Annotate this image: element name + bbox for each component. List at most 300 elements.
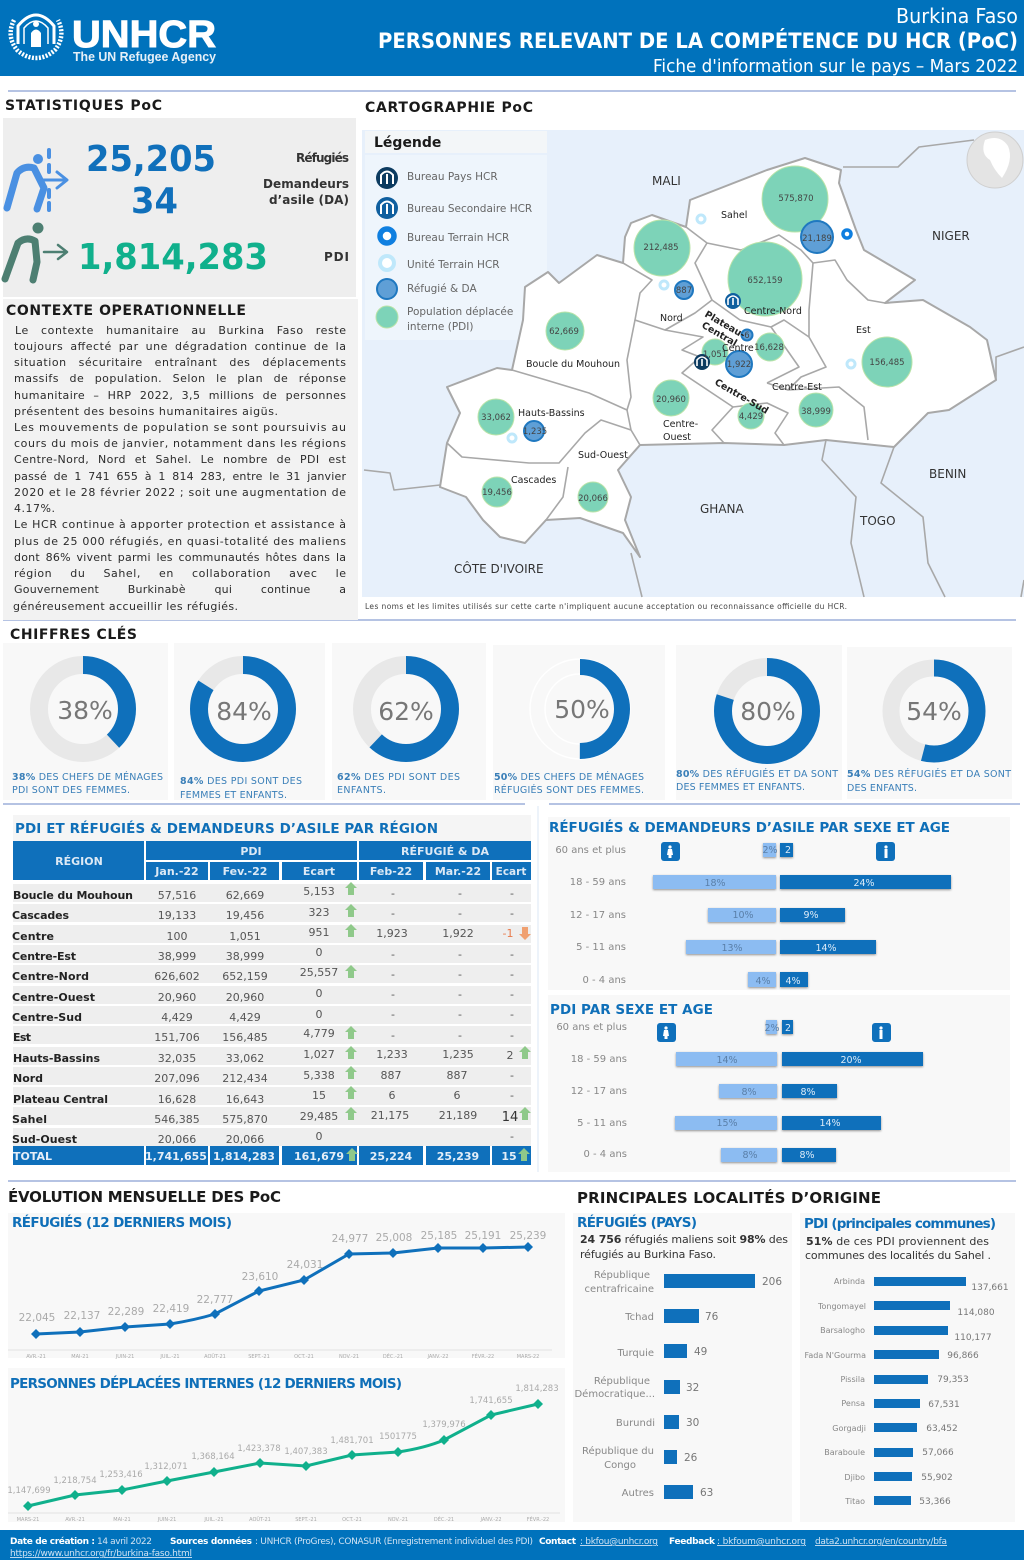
table rows: - [391, 948, 395, 961]
donut 84%: 84% DES PDI SONT DES [180, 776, 302, 787]
bubble values: 575,870 [778, 194, 814, 204]
table rows: 20,066 [226, 1133, 264, 1146]
panel: origine PDI: 51% de ces PDI proviennent des [806, 1235, 989, 1248]
table rows: 212,434 [222, 1072, 268, 1085]
text block: context paragraph: 2020 et le 28 février 2022 ; soit une augmentation de [14, 486, 346, 499]
table rows: - [391, 887, 395, 900]
panel: statistiques PoC: STATISTIQUES PoC [5, 98, 162, 114]
panel: origine réfugiés: 76 [705, 1311, 719, 1323]
line chart: PDI: DÉC.-21 [434, 1515, 454, 1523]
table rows: Hauts-Bassins [13, 1052, 100, 1065]
table title: PDI ET RÉFUGIÉS & DEMANDEURS D’ASILE PAR RÉGION [15, 820, 438, 837]
bubble values [481, 194, 905, 504]
donut 50%: 50% DES CHEFS DE MÉNAGES [494, 771, 644, 783]
text block: context paragraph: Le contexte humanitaire au Burkina Faso reste [15, 324, 346, 337]
table rows: 6 [454, 1089, 460, 1102]
table rows: 5,153 [303, 885, 335, 898]
line chart: réfugiés: RÉFUGIÉS (12 DERNIERS MOIS) [12, 1214, 232, 1231]
stat: réfugiés [86, 139, 349, 180]
footer: 14 avril 2022 [97, 1537, 152, 1547]
table total row [13, 1146, 531, 1165]
chart: réfugiés par sexe et age: 9% [803, 910, 819, 921]
heading: principales localités: PRINCIPALES LOCALITÉS D’ORIGINE [577, 1188, 881, 1207]
chart: PDI par sexe et age: 8% [799, 1150, 815, 1161]
footer: Sources données [170, 1536, 252, 1547]
chart: PDI par sexe et age: 14% [819, 1118, 841, 1129]
line chart: PDI: 1,379,976 [422, 1420, 466, 1430]
chart: PDI par sexe et age: 15% [716, 1118, 738, 1129]
chart: réfugiés par sexe et age [548, 817, 1010, 990]
heading: évolution mensuelle: ÉVOLUTION MENSUELLE DES PoC [8, 1187, 281, 1206]
panel: origine réfugiés: 49 [694, 1346, 707, 1358]
chart: réfugiés par sexe et age: 12 - 17 ans [570, 910, 626, 921]
chart: PDI par sexe et age: 20% [840, 1055, 862, 1066]
chart: réfugiés par sexe et age: 14% [815, 943, 837, 954]
table header: Ecart [496, 866, 526, 878]
footer: Contact [539, 1537, 577, 1547]
table rows: 62,669 [226, 889, 264, 902]
donut 80%: DES FEMMES ET ENFANTS. [676, 782, 805, 793]
panel: origine PDI: 110,177 [954, 1333, 992, 1343]
table rows: Centre [12, 930, 54, 943]
donut 50%: RÉFUGIÉS SONT DES FEMMES. [494, 784, 644, 796]
table rows: - [391, 988, 395, 1001]
panel: origine PDI: Pissila [840, 1375, 865, 1384]
map legend: Bureau Terrain HCR [407, 232, 509, 244]
panel: origine réfugiés: République [594, 1269, 650, 1281]
table rows: Centre-Nord [12, 970, 89, 983]
table rows: 16,628 [158, 1093, 196, 1106]
table rows: Centre-Sud [12, 1011, 82, 1024]
donut 84%: 84% [216, 697, 272, 726]
text block: context paragraph: Centre-Nord, Nord et Sahel. Le nombre de PDI est [14, 453, 347, 466]
stat: réfugiés: 25,205 [86, 139, 216, 180]
table rows: - [458, 907, 462, 920]
text block: context paragraph: Les mouvements de population se sont poursuivis au [14, 421, 346, 434]
line chart: PDI: FÉVR.-22 [527, 1515, 549, 1523]
stat: demandeurs d'asile: d’asile (DA) [269, 193, 349, 207]
table rows: - [458, 968, 462, 981]
line chart: réfugiés: 22,045 [19, 1312, 55, 1324]
chart: réfugiés par sexe et age: RÉFUGIÉS & DEMANDEURS D’ASILE PAR SEXE ET AGE [549, 819, 950, 836]
chart: PDI par sexe et age: 14% [716, 1055, 738, 1066]
text block: context paragraph [13, 324, 347, 613]
header title: Burkina Faso [896, 4, 1018, 28]
table rows: Centre-Est [12, 950, 76, 963]
footer [0, 1530, 1024, 1560]
table rows: 1,027 [303, 1048, 335, 1061]
region labels: Centre [722, 343, 754, 354]
table rows: 626,602 [154, 970, 200, 983]
chart: PDI par sexe et age: 60 ans et plus [556, 1022, 627, 1033]
line chart: réfugiés: 24,977 [332, 1233, 368, 1245]
line chart: PDI: MAI-21 [113, 1517, 131, 1523]
bubble values: 62,669 [549, 327, 579, 337]
bubble values: 6 [744, 331, 750, 341]
table header: Feb-22 [370, 865, 412, 878]
line chart: PDI: AVR.-21 [65, 1517, 85, 1523]
text block: context paragraph: région du Sahel, en collaboration avec le [14, 567, 346, 580]
section: chiffres clés: CHIFFRES CLÉS [10, 626, 137, 643]
text block: context paragraph: Gouvernement Burkinabè qui continue a [14, 583, 346, 596]
table rows: 19,456 [226, 909, 264, 922]
table rows: 546,385 [154, 1113, 200, 1126]
table rows: - [458, 948, 462, 961]
table rows: - [510, 948, 514, 961]
panel: origine PDI: 114,080 [957, 1308, 995, 1318]
donut 54% [847, 668, 1011, 794]
region labels: Est [856, 325, 871, 336]
table rows: 151,706 [154, 1031, 200, 1044]
table rows: - [510, 887, 514, 900]
line chart: réfugiés: MAI-21 [71, 1354, 89, 1360]
donut 62% [337, 665, 460, 796]
change arrows [345, 882, 531, 1120]
line chart: réfugiés: 24,031 [287, 1259, 323, 1271]
icon: refugee crossing border [7, 150, 67, 210]
table header: Fev.-22 [223, 865, 267, 878]
line chart: PDI: 1,253,416 [99, 1470, 143, 1480]
line chart: réfugiés: 25,185 [421, 1230, 457, 1242]
table rows: 21,189 [439, 1109, 477, 1122]
chart: réfugiés par sexe et age: 13% [721, 943, 743, 954]
table rows: 20,960 [226, 991, 264, 1004]
table rows: 14 [502, 1110, 518, 1125]
bubble values: 21,189 [802, 234, 832, 244]
chart: réfugiés par sexe et age: 60 ans et plus [555, 845, 626, 856]
table rows: 0 [316, 987, 322, 1000]
chart: PDI par sexe et age: 18 - 59 ans [571, 1054, 627, 1065]
HCR offices [508, 215, 855, 442]
icon: globe [967, 132, 1023, 188]
icon: UNHCR emblem [11, 15, 61, 58]
table rows: 156,485 [222, 1031, 268, 1044]
table header: RÉFUGIÉ & DA [401, 845, 489, 858]
table rows: - [510, 1069, 514, 1082]
table header: Ecart [303, 865, 335, 878]
donut 80%: 80% [740, 697, 796, 726]
table rows: 5,338 [303, 1069, 335, 1082]
panel: origine réfugiés: 32 [686, 1382, 699, 1394]
section: chiffres clés [3, 626, 1012, 801]
panel: origine réfugiés: 26 [684, 1452, 698, 1464]
panel: origine PDI: 53,366 [919, 1497, 951, 1507]
line chart: PDI: 1,312,071 [144, 1462, 188, 1472]
line chart: réfugiés: JUIL.-21 [159, 1354, 180, 1360]
panel: origine réfugiés: 24 756 réfugiés maliens soit 98% des [580, 1233, 788, 1246]
region labels: Hauts-Bassins [518, 408, 585, 419]
panel: origine réfugiés: Turquie [617, 1348, 654, 1359]
heading: cartographie: CARTOGRAPHIE PoC [365, 100, 533, 116]
bubble values: 1,922 [727, 360, 751, 370]
line chart: PDI: 1,407,383 [284, 1447, 328, 1457]
panel: map [362, 130, 1024, 597]
donut 50%: 50% [554, 695, 610, 724]
stat: PDI: 1,814,283 [78, 237, 268, 278]
chart: réfugiés par sexe et age: 4% [755, 976, 771, 987]
table rows: 1,233 [376, 1048, 408, 1061]
bubble values: 16,628 [754, 343, 784, 353]
table total row: 25,239 [437, 1150, 479, 1163]
footer: data2.unhcr.org/en/country/bfa [815, 1537, 947, 1547]
line chart: réfugiés: NOV.-21 [339, 1354, 359, 1360]
table rows: 21,175 [371, 1109, 409, 1122]
table rows: 887 [380, 1069, 402, 1082]
table rows: 1,922 [442, 927, 474, 940]
text block: context paragraph: plus de 25 000 réfugiés, en quasi-totalité des maliens [14, 535, 346, 548]
line chart: réfugiés: 22,137 [64, 1310, 100, 1322]
chart: réfugiés par sexe et age: 2 [785, 845, 791, 856]
table header: RÉGION [55, 855, 103, 868]
line chart: réfugiés: OCT.-21 [294, 1354, 314, 1360]
map legend: Bureau Pays HCR [407, 171, 498, 183]
line chart: réfugiés: JANV.-22 [426, 1354, 449, 1360]
chart: PDI par sexe et age: 2% [764, 1023, 780, 1034]
table rows [12, 882, 531, 1146]
icon: displaced person [5, 222, 67, 280]
text block: context paragraph: massifs de population. Selon le plan de réponse [14, 372, 346, 385]
table rows: 575,870 [222, 1113, 268, 1126]
footer: : UNHCR (ProGres), CONASUR (Enregistrement individuel des PDI) [255, 1537, 533, 1547]
table total row: 161,679 [294, 1150, 344, 1163]
region labels: Cascades [511, 475, 556, 486]
panel: origine PDI: 96,866 [947, 1351, 979, 1361]
stat: PDI: PDI [324, 250, 349, 264]
line chart: réfugiés: 25,239 [510, 1230, 546, 1242]
panel: origine PDI [800, 1213, 1015, 1522]
table rows: 25,557 [300, 966, 338, 979]
panel: origine PDI: Djibo [844, 1473, 865, 1482]
panel: origine réfugiés [573, 1213, 792, 1522]
bubble values: 19,456 [482, 488, 512, 498]
bubble values: 20,066 [578, 494, 608, 504]
table rows: 32,035 [158, 1052, 196, 1065]
chart: PDI par sexe et age: 8% [742, 1150, 758, 1161]
donut 38%: 38% [57, 696, 113, 725]
chart: réfugiés par sexe et age: 2% [762, 845, 778, 856]
panel: origine réfugiés: 63 [700, 1487, 713, 1499]
table rows: - [510, 1130, 514, 1143]
chart: PDI par sexe et age: 8% [741, 1087, 757, 1098]
chart: PDI par sexe et age: PDI PAR SEXE ET AGE [550, 1002, 713, 1018]
table total row: TOTAL [13, 1150, 52, 1163]
line chart: PDI: OCT.-21 [342, 1517, 362, 1523]
table rows: - [458, 1008, 462, 1021]
table rows: Cascades [12, 909, 69, 922]
line chart: PDI: MARS-21 [17, 1517, 39, 1523]
table rows: Nord [13, 1072, 43, 1085]
panel: origine PDI: 79,353 [937, 1375, 969, 1385]
panel: origine PDI: Gorgadji [832, 1424, 866, 1433]
map legend: Réfugié & DA [407, 283, 477, 295]
donut 80% [676, 667, 838, 793]
donut 38% [12, 665, 163, 796]
panel: origine PDI: 57,066 [922, 1448, 954, 1458]
table rows: 4,779 [303, 1027, 335, 1040]
panel: origine PDI: 63,452 [926, 1424, 958, 1434]
chart: réfugiés par sexe et age: 0 - 4 ans [582, 975, 626, 986]
stat: demandeurs d'asile: 34 [131, 181, 178, 222]
line chart: PDI: 1,368,164 [191, 1452, 235, 1462]
panel: origine PDI: Barsalogho [820, 1326, 865, 1335]
panel: origine réfugiés: République [594, 1375, 650, 1387]
icon: woman [661, 842, 680, 861]
country labels [454, 174, 970, 576]
map legend: Population déplacée [407, 306, 513, 318]
line chart: réfugiés: FÉVR.-22 [472, 1352, 494, 1360]
table rows: 887 [446, 1069, 468, 1082]
country labels: GHANA [700, 502, 745, 516]
chart: PDI par sexe et age: 2 [785, 1023, 791, 1034]
line chart: PDI: 1,218,754 [53, 1476, 97, 1486]
chart: réfugiés par sexe et age: 18 - 59 ans [570, 877, 626, 888]
panel: origine réfugiés: Démocratique... [574, 1388, 655, 1400]
footer: : bkfou@unhcr.org [580, 1537, 658, 1547]
map legend: Légende [374, 135, 441, 151]
panel: regional table [12, 815, 531, 1165]
region labels: Centre- [663, 419, 698, 430]
panel: contexte opérationnelle: CONTEXTE OPERATIONNELLE [6, 303, 246, 319]
icon: man [872, 1023, 891, 1042]
panel: origine PDI: Baraboule [824, 1448, 865, 1457]
text block: context paragraph: cours du mois de janvier, notamment dans les régions [14, 437, 346, 450]
table rows: -1 [503, 927, 513, 940]
header title [378, 4, 1018, 77]
chart: réfugiés par sexe et age: 10% [732, 910, 754, 921]
line chart: PDI: JUIN-21 [157, 1517, 176, 1523]
stat: demandeurs d'asile [131, 177, 349, 222]
panel: origine réfugiés: réfugiés au Burkina Faso. [580, 1248, 716, 1261]
region labels [511, 210, 871, 486]
table rows: - [391, 907, 395, 920]
bubble values: 33,062 [481, 413, 511, 423]
panel: origine réfugiés: Tchad [624, 1312, 654, 1323]
line chart: PDI: 1,147,699 [7, 1486, 51, 1496]
table rows: 951 [308, 926, 330, 939]
table rows: 20,960 [158, 991, 196, 1004]
table rows: Plateau Central [13, 1093, 108, 1106]
table rows: 2 [506, 1049, 514, 1062]
footer: Feedback [669, 1537, 716, 1547]
text block: context paragraph: dont 86% vivent parmi les communautés hôtes dans la [14, 551, 346, 564]
donut 54%: DES ENFANTS. [847, 783, 917, 794]
line chart: PDI: 1,741,655 [469, 1396, 513, 1406]
text block: context paragraph: passé de 1 741 655 à 1 814 283, entre le 31 janvier [14, 470, 346, 483]
country labels: TOGO [859, 514, 896, 528]
panel: origine PDI: Tongomayel [817, 1302, 866, 1311]
table rows: 16,643 [226, 1093, 264, 1106]
footer: : bkfoum@unhcr.org [717, 1537, 806, 1547]
UNHCR logo: UNHCR [72, 14, 216, 56]
text block: context paragraph: généreusement accueillir les réfugiés. [13, 600, 238, 613]
panel: origine PDI: 55,902 [921, 1473, 953, 1483]
line chart: réfugiés: AVR.-21 [26, 1354, 46, 1360]
panel: origine réfugiés: Congo [604, 1460, 636, 1471]
line chart: réfugiés: AOÛT-21 [204, 1353, 226, 1360]
chart: PDI par sexe et age: 5 - 11 ans [577, 1118, 627, 1129]
panel: origine réfugiés: 30 [686, 1417, 699, 1429]
text block: context paragraph: situation sécuritaire entraînant des déplacements [14, 356, 346, 369]
table header: Jan.-22 [154, 865, 199, 878]
table rows: - [458, 988, 462, 1001]
country labels: NIGER [932, 229, 970, 243]
line chart: réfugiés: MARS-22 [517, 1354, 539, 1360]
bubble values: 1,051 [703, 350, 727, 360]
table total row: 15 [501, 1150, 517, 1163]
panel: origine réfugiés: RÉFUGIÉS (PAYS) [577, 1214, 697, 1231]
donut 50% [494, 659, 644, 796]
text block: context paragraph: toujours affecté par une dégradation continue de la [14, 340, 346, 353]
region labels: Plateau- [702, 309, 747, 341]
line chart: PDI: 1501775 [379, 1432, 417, 1442]
table rows: 1,923 [376, 927, 408, 940]
table rows: Sud-Ouest [12, 1133, 77, 1146]
map legend [365, 131, 547, 333]
donut 62%: 62% [378, 697, 434, 726]
donut 62%: ENFANTS. [337, 785, 386, 796]
line chart: réfugiés [8, 1213, 565, 1360]
table rows: 57,516 [158, 889, 196, 902]
table rows: Boucle du Mouhoun [13, 889, 133, 902]
table rows: - [510, 968, 514, 981]
bubble values: 4,429 [739, 412, 763, 422]
text block: context paragraph: humanitaire – HRP 2022, 3,5 millions de personnes [14, 389, 346, 402]
table rows: 1,235 [442, 1048, 474, 1061]
line chart: réfugiés: 25,008 [376, 1232, 412, 1244]
region labels: Centre-Sud [712, 377, 770, 417]
table rows: - [391, 1029, 395, 1042]
region labels: Ouest [663, 432, 691, 443]
table rows: 0 [316, 946, 322, 959]
chart: réfugiés par sexe et age: 4% [785, 976, 801, 987]
line chart: PDI: JUIL.-21 [203, 1517, 224, 1523]
bubble values: 212,485 [643, 243, 679, 253]
table rows: - [391, 1008, 395, 1021]
table rows: 323 [308, 906, 330, 919]
region labels: Sud-Ouest [578, 450, 628, 461]
Burkina Faso territory [440, 158, 996, 557]
bubble values: 1,235 [523, 427, 547, 437]
map disclaimer: Les noms et les limites utilisés sur cette carte n'impliquent aucune acceptation ou reconnaissance officielle du HCR. [365, 602, 847, 611]
table rows: 15 [312, 1089, 326, 1102]
UNHCR logo [11, 14, 217, 64]
region labels: Centre-Est [772, 382, 822, 393]
line chart: PDI: 1,814,283 [515, 1384, 559, 1394]
bubble values: 652,159 [747, 276, 783, 286]
chart: PDI par sexe et age: 12 - 17 ans [571, 1086, 627, 1097]
donut 38%: 38% DES CHEFS DE MÉNAGES [12, 771, 163, 783]
table total row: 25,224 [370, 1150, 413, 1163]
line chart: PDI: NOV.-21 [388, 1517, 408, 1523]
chart: réfugiés par sexe et age: 24% [853, 878, 875, 889]
table rows: - [510, 988, 514, 1001]
panel: origine réfugiés: République du [582, 1445, 654, 1457]
table rows: Est [13, 1031, 31, 1044]
line chart: PDI [7, 1368, 565, 1523]
region labels: Centre-Nord [744, 306, 802, 317]
icon: woman [657, 1023, 676, 1042]
panel: origine PDI: 67,531 [928, 1400, 960, 1410]
text block: context paragraph: Le HCR continue à apporter protection et assistance à [14, 518, 346, 531]
bubble values: 156,485 [869, 358, 905, 368]
region labels: Nord [660, 313, 683, 324]
panel: origine PDI: 137,661 [971, 1283, 1009, 1293]
donut 84% [180, 665, 302, 801]
bubble values: 38,999 [801, 407, 831, 417]
panel: statistiques PoC [3, 98, 356, 297]
table rows: - [510, 1089, 514, 1102]
table rows: 33,062 [226, 1052, 264, 1065]
